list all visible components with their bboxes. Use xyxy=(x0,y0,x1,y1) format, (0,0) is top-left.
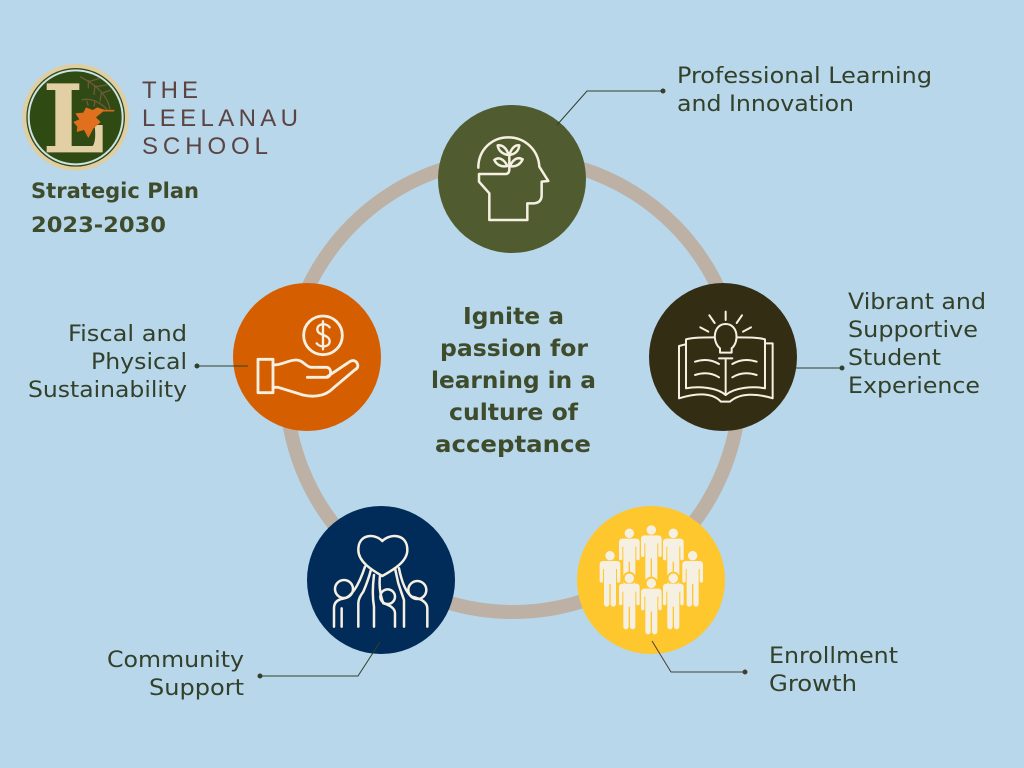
label: community support: Support xyxy=(149,675,244,701)
central mission statement xyxy=(431,304,596,458)
label: student experience: Vibrant and xyxy=(848,289,986,315)
label: community support xyxy=(107,647,244,701)
label: student experience: Student xyxy=(848,345,941,371)
label: professional learning xyxy=(677,63,932,117)
label: student experience xyxy=(848,289,986,399)
label: student experience: Experience xyxy=(848,373,980,399)
icon: group of people xyxy=(600,525,703,634)
logo: school crest xyxy=(22,64,129,171)
label: enrollment growth: Enrollment xyxy=(769,643,898,669)
heading: strategic plan xyxy=(31,179,199,237)
central mission statement: passion for xyxy=(440,336,589,362)
leader line: community support xyxy=(258,642,380,678)
label: fiscal sustainability xyxy=(28,321,187,403)
pillar: student experience circle with book icon xyxy=(649,283,797,431)
logo wordmark: SCHOOL xyxy=(142,133,268,160)
heading: strategic plan: Strategic Plan xyxy=(31,179,199,203)
label: fiscal sustainability: Physical xyxy=(91,349,187,375)
label: fiscal sustainability: Sustainability xyxy=(28,377,187,403)
label: fiscal sustainability: Fiscal and xyxy=(68,321,187,347)
label: enrollment growth xyxy=(769,643,898,697)
label: community support: Community xyxy=(107,647,244,673)
central mission statement: culture of xyxy=(449,400,579,426)
leader line: fiscal sustainability xyxy=(195,364,248,368)
pillar: fiscal sustainability circle with hand icon xyxy=(233,283,381,431)
label: enrollment growth: Growth xyxy=(769,671,857,697)
pillar: professional learning circle with head icon xyxy=(438,105,586,253)
leader line: professional learning xyxy=(557,89,665,125)
icon: people raising a heart xyxy=(334,536,427,627)
label: professional learning: and Innovation xyxy=(677,91,854,117)
central mission statement: learning in a xyxy=(431,368,596,394)
pillar: enrollment growth circle with people icon xyxy=(577,506,725,654)
pillar: community support circle with heart icon xyxy=(307,506,455,654)
ring connecting the five pillars xyxy=(286,158,740,612)
central mission statement: acceptance xyxy=(435,432,591,458)
icon: head with sprout xyxy=(478,137,548,220)
leader line: student experience xyxy=(796,366,844,370)
heading: strategic plan: 2023-2030 xyxy=(31,213,166,237)
label: professional learning: Professional Learning xyxy=(677,63,932,89)
logo wordmark: THE xyxy=(142,77,198,104)
icon: hand holding a coin xyxy=(258,316,358,396)
logo wordmark: LEELANAU xyxy=(142,105,298,132)
icon: open book with light bulb xyxy=(679,312,773,402)
leader line: enrollment growth xyxy=(652,641,747,674)
label: student experience: Supportive xyxy=(848,317,978,343)
logo wordmark xyxy=(142,77,298,160)
central mission statement: Ignite a xyxy=(463,304,564,330)
